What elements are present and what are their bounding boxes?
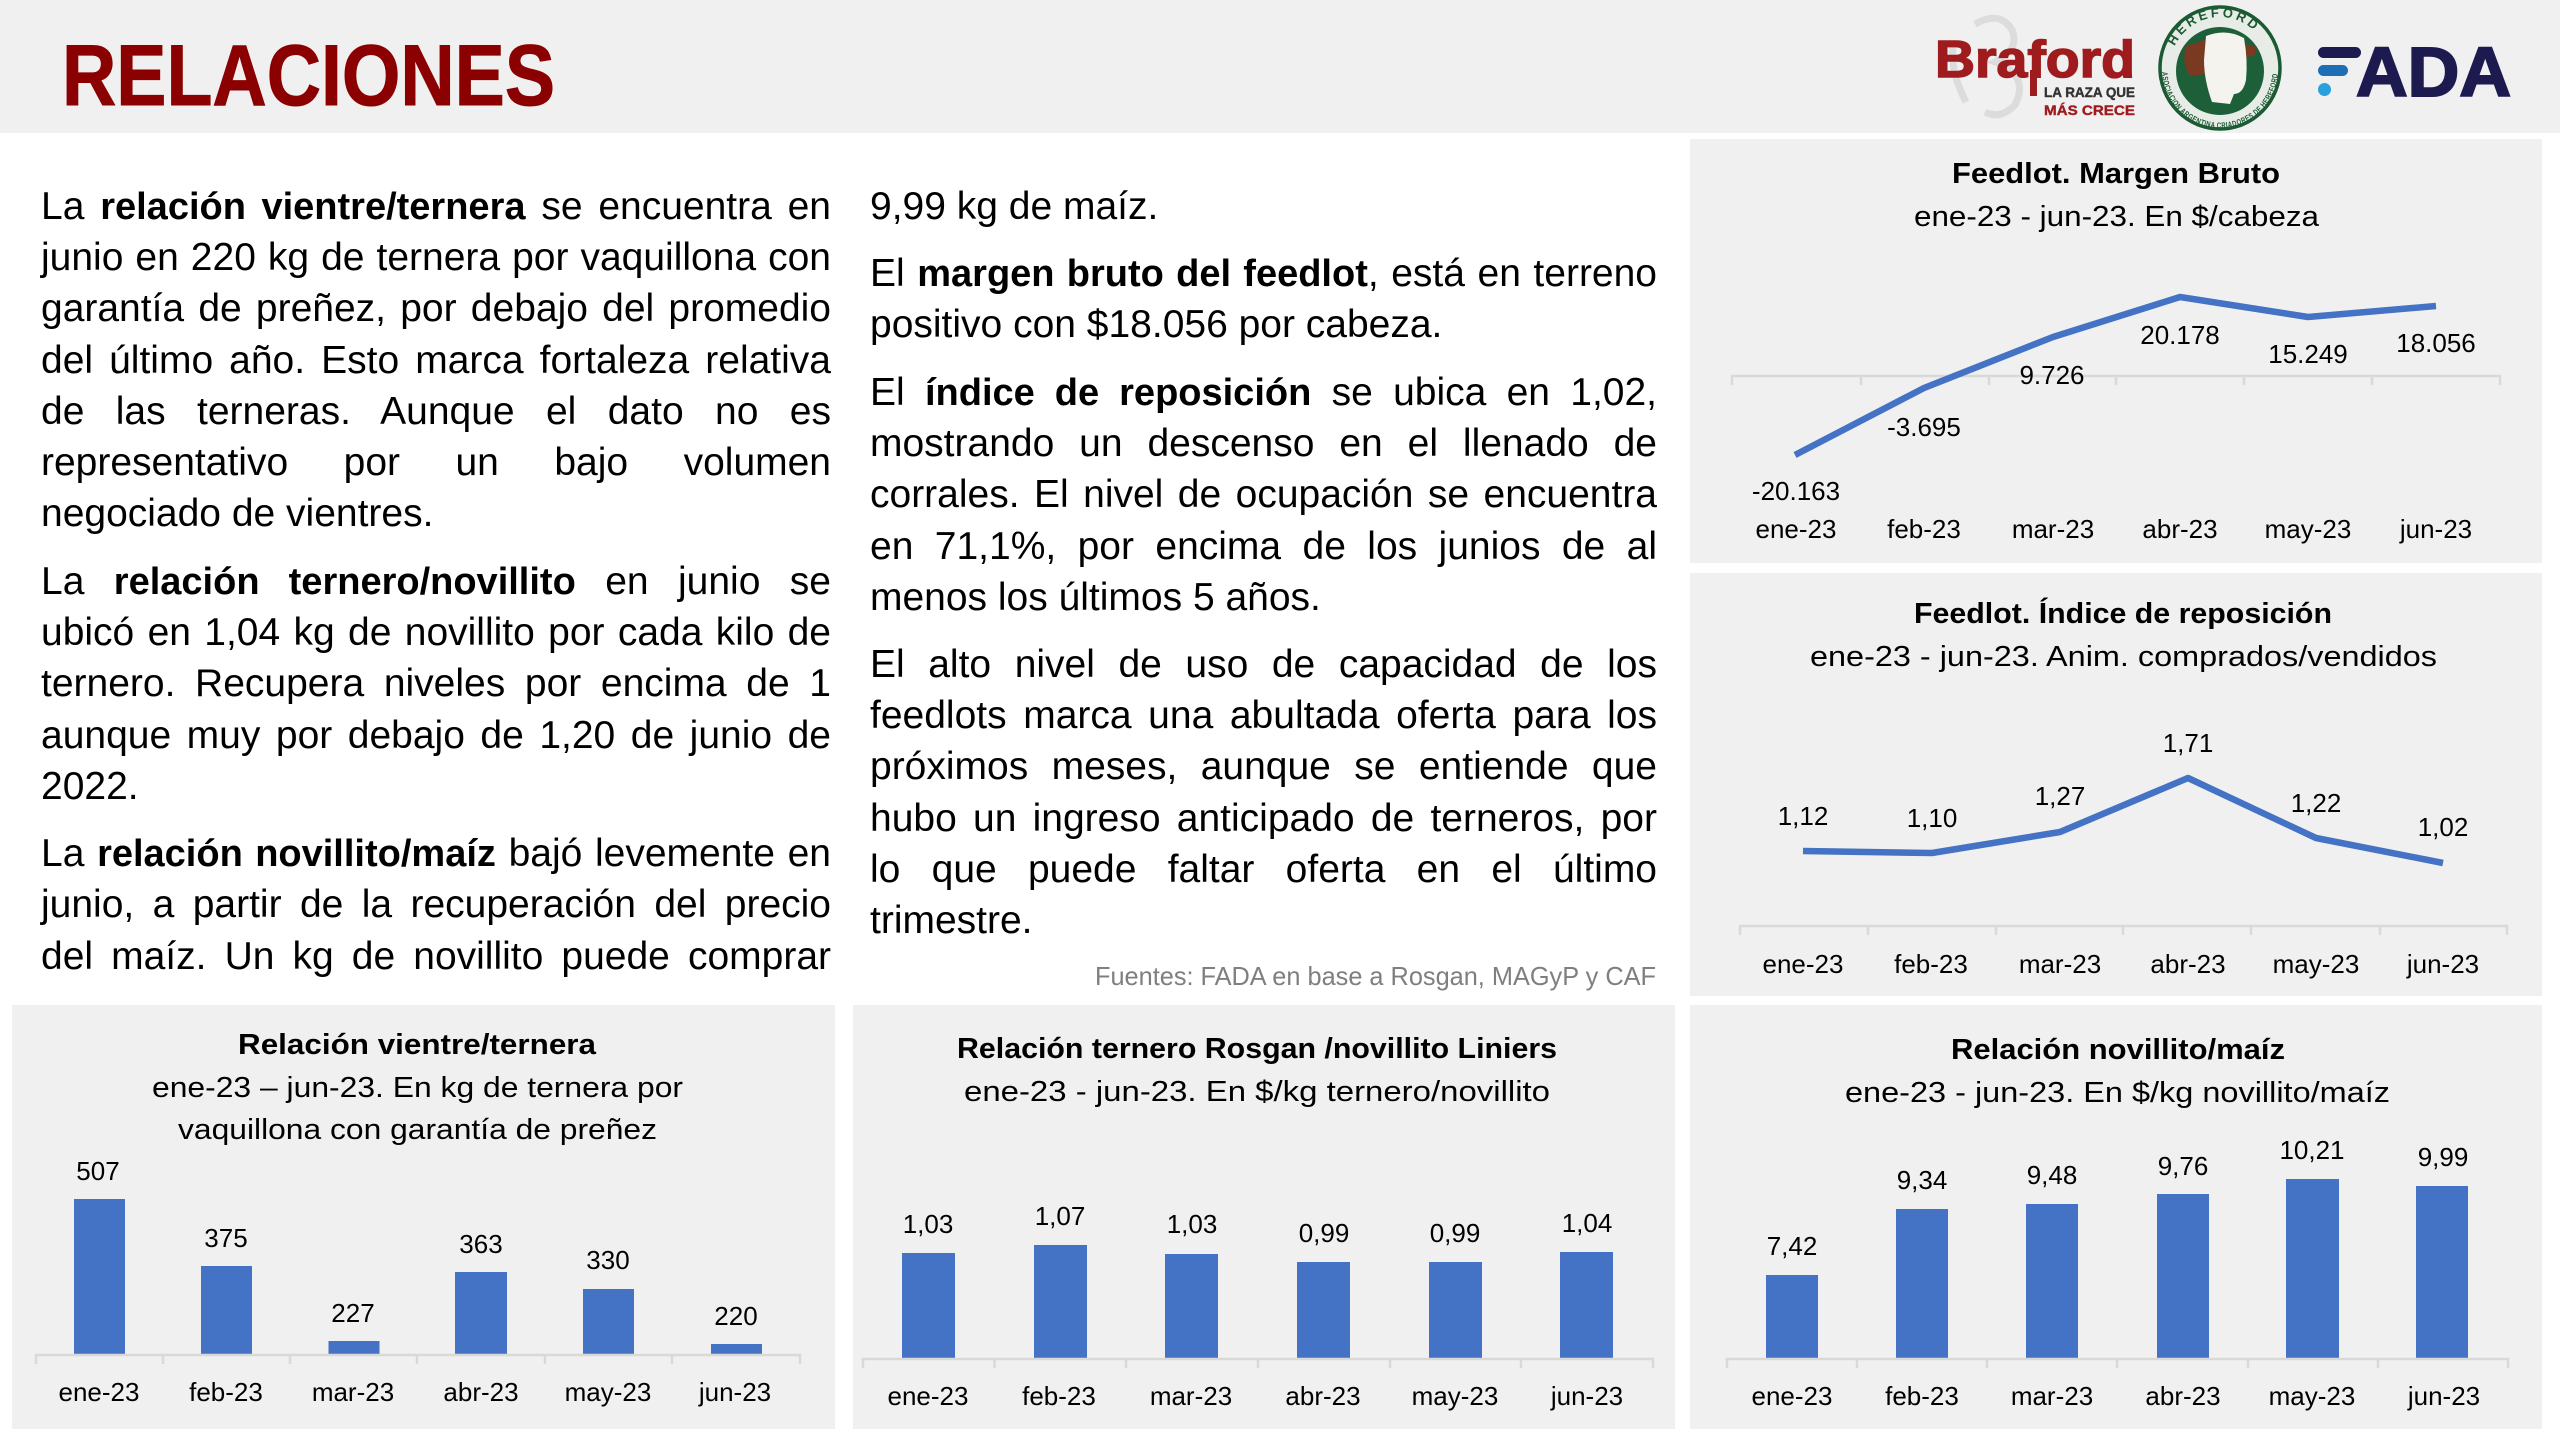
text block: relacion ternero/novillito: aunque muy por debajo de 1,20 de junio de bbox=[41, 714, 831, 757]
value labels: 227 bbox=[331, 1298, 375, 1328]
text block: relacion ternero/novillito: 2022. bbox=[41, 765, 139, 808]
month labels: mar-23 bbox=[2019, 949, 2101, 979]
value labels: 1,10 bbox=[1907, 803, 1957, 833]
text block: capacidad de feedlots: hubo un ingreso anticipado de terneros, por bbox=[870, 797, 1657, 840]
text block: relacion vientre/ternera: La relación vientre/ternera se encuentra en bbox=[41, 185, 831, 228]
value labels: 10,21 bbox=[2279, 1135, 2345, 1165]
value labels: -20.163 bbox=[1752, 476, 1840, 506]
month labels: jun-23 bbox=[2399, 514, 2472, 544]
text block: relacion vientre/ternera: garantía de preñez, por debajo del promedio bbox=[41, 287, 831, 330]
month labels: abr-23 bbox=[2142, 514, 2218, 544]
value labels: 220 bbox=[714, 1301, 758, 1331]
text block: continuation: 9,99 kg de maíz. bbox=[870, 185, 1158, 228]
chart subtitle: ene-23 - jun-23. En $/kg novillito/maíz bbox=[1845, 1077, 2390, 1109]
value labels: 1,22 bbox=[2291, 788, 2341, 818]
logo: Braford bbox=[1935, 18, 2135, 118]
month labels: jun-23 bbox=[2407, 1381, 2480, 1411]
logo: FADA: ADA bbox=[2356, 33, 2511, 111]
month labels: abr-23 bbox=[443, 1377, 519, 1407]
value labels: 9,99 bbox=[2418, 1142, 2468, 1172]
text block: relacion vientre/ternera: de las terneras. Aunque el dato no es bbox=[41, 390, 831, 433]
value labels: 1,12 bbox=[1778, 801, 1828, 831]
value labels: 7,42 bbox=[1767, 1231, 1817, 1261]
text block: indice de reposicion: corrales. El nivel de ocupación se encuentra bbox=[870, 473, 1657, 516]
text block: indice de reposicion: mostrando un descenso en el llenado de bbox=[870, 422, 1657, 465]
value labels: 0,99 bbox=[1299, 1218, 1349, 1248]
text block: relacion vientre/ternera: del último año. Esto marca fortaleza relativa bbox=[41, 339, 831, 382]
panel: Feedlot margen bruto bbox=[1690, 139, 2542, 563]
panel: relacion ternero/novillito bbox=[853, 1005, 1675, 1429]
value labels: 18.056 bbox=[2396, 328, 2476, 358]
month labels: may-23 bbox=[565, 1377, 651, 1407]
value labels: 1,03 bbox=[903, 1209, 953, 1239]
value labels: 363 bbox=[459, 1229, 503, 1259]
value labels: 507 bbox=[76, 1156, 120, 1186]
logo: Hereford bbox=[2158, 5, 2282, 131]
value labels: 9.726 bbox=[2019, 360, 2085, 390]
month labels: mar-23 bbox=[2011, 1381, 2093, 1411]
value labels: 1,71 bbox=[2163, 728, 2213, 758]
logo: Hereford: ASOCIACION ARGENTINA CRIADORES DE HEREFORD bbox=[2162, 72, 2278, 128]
month labels: feb-23 bbox=[189, 1377, 263, 1407]
logo: Hereford: HEREFORD bbox=[2168, 8, 2258, 46]
value labels bbox=[1767, 1135, 2468, 1261]
chart title: Relación vientre/ternera bbox=[238, 1029, 597, 1061]
text block: relacion vientre/ternera bbox=[40, 185, 831, 535]
text block: margen bruto: positivo con $18.056 por cabeza. bbox=[870, 303, 1442, 346]
text block: capacidad de feedlots: feedlots marca una abultada oferta para los bbox=[870, 694, 1657, 737]
value labels: 1,07 bbox=[1035, 1201, 1085, 1231]
text block: relacion ternero/novillito bbox=[41, 560, 831, 808]
text block: capacidad de feedlots: trimestre. bbox=[870, 899, 1033, 942]
bar chart bbox=[1766, 1179, 2468, 1358]
text block: relacion vientre/ternera: junio en 220 kg de ternera por vaquillona con bbox=[41, 236, 831, 279]
month labels: abr-23 bbox=[2145, 1381, 2221, 1411]
chart title: Feedlot. Margen Bruto bbox=[1952, 158, 2280, 190]
month labels: may-23 bbox=[2273, 949, 2359, 979]
month labels: mar-23 bbox=[1150, 1381, 1232, 1411]
chart title: Relación ternero Rosgan /novillito Liniers bbox=[957, 1033, 1557, 1065]
month labels: ene-23 bbox=[59, 1377, 139, 1407]
chart subtitle: ene-23 - jun-23. Anim. comprados/vendidos bbox=[1810, 641, 2437, 673]
value labels: -3.695 bbox=[1887, 412, 1961, 442]
month labels: feb-23 bbox=[1894, 949, 1968, 979]
text block: relacion ternero/novillito: ternero. Recupera niveles por encima de 1 bbox=[41, 662, 831, 705]
chart subtitle: vaquillona con garantía de preñez bbox=[178, 1114, 657, 1146]
text block: capacidad de feedlots: El alto nivel de uso de capacidad de los bbox=[870, 643, 1657, 686]
month labels: mar-23 bbox=[312, 1377, 394, 1407]
text block: capacidad de feedlots: próximos meses, aunque se entiende que bbox=[870, 745, 1657, 788]
line chart: indice bbox=[1803, 778, 2443, 863]
value labels: 375 bbox=[204, 1223, 248, 1253]
value labels bbox=[76, 1156, 758, 1331]
header band bbox=[0, 0, 2560, 133]
month labels: jun-23 bbox=[698, 1377, 771, 1407]
panel: Feedlot indice de reposicion bbox=[1690, 573, 2542, 996]
text block: indice de reposicion: El índice de reposición se ubica en 1,02, bbox=[870, 371, 1657, 414]
text block: indice de reposicion bbox=[870, 371, 1657, 619]
panel: relacion novillito/maiz bbox=[1690, 1005, 2542, 1429]
value labels bbox=[1752, 320, 2476, 506]
month labels bbox=[888, 1381, 1623, 1411]
chart title: Feedlot. Índice de reposición bbox=[1914, 596, 2332, 630]
chart title: Relación novillito/maíz bbox=[1951, 1034, 2285, 1066]
text block: margen bruto bbox=[870, 252, 1657, 346]
value labels: 15.249 bbox=[2268, 339, 2348, 369]
month labels: mar-23 bbox=[2012, 514, 2094, 544]
month labels: feb-23 bbox=[1885, 1381, 1959, 1411]
month labels: ene-23 bbox=[888, 1381, 968, 1411]
line chart: margen bruto bbox=[1795, 297, 2436, 455]
value labels: 330 bbox=[586, 1245, 630, 1275]
value labels: 1,04 bbox=[1562, 1208, 1612, 1238]
text block: relacion novillito/maiz: junio, a partir de la recuperación del precio bbox=[41, 883, 831, 926]
month labels bbox=[1763, 949, 2479, 979]
bar chart bbox=[74, 1199, 762, 1354]
month labels: abr-23 bbox=[2150, 949, 2226, 979]
month labels: ene-23 bbox=[1752, 1381, 1832, 1411]
value labels: 20.178 bbox=[2140, 320, 2220, 350]
month labels: feb-23 bbox=[1022, 1381, 1096, 1411]
month labels: jun-23 bbox=[2406, 949, 2479, 979]
text block: relacion ternero/novillito: La relación ternero/novillito en junio se bbox=[41, 560, 831, 603]
text block: relacion novillito/maiz: La relación novillito/maíz bajó levemente en bbox=[41, 832, 831, 875]
text block: relacion novillito/maiz: del maíz. Un kg de novillito puede comprar bbox=[41, 935, 831, 978]
source note: Fuentes: FADA en base a Rosgan, MAGyP y CAF bbox=[1095, 961, 1656, 991]
panel: relacion vientre/ternera bbox=[12, 1005, 835, 1429]
text block: indice de reposicion: menos los últimos 5 años. bbox=[870, 576, 1321, 619]
month labels: may-23 bbox=[2269, 1381, 2355, 1411]
value labels bbox=[903, 1201, 1612, 1248]
value labels: 1,03 bbox=[1167, 1209, 1217, 1239]
value labels: 9,34 bbox=[1897, 1165, 1947, 1195]
value labels: 1,27 bbox=[2035, 781, 2085, 811]
month labels bbox=[59, 1377, 771, 1407]
logo: Braford: LA RAZA QUE bbox=[2044, 84, 2135, 100]
logo: Braford: Braford bbox=[1935, 31, 2135, 89]
month labels: ene-23 bbox=[1756, 514, 1836, 544]
month labels bbox=[1756, 514, 2472, 544]
value labels: 9,48 bbox=[2027, 1160, 2077, 1190]
text block: relacion vientre/ternera: negociado de vientres. bbox=[41, 492, 433, 535]
value labels: 9,76 bbox=[2158, 1151, 2208, 1181]
month labels: abr-23 bbox=[1285, 1381, 1361, 1411]
bar chart bbox=[902, 1245, 1613, 1358]
value labels: 1,02 bbox=[2418, 812, 2468, 842]
month labels bbox=[1752, 1381, 2480, 1411]
text block: capacidad de feedlots: lo que puede faltar oferta en el último bbox=[870, 848, 1657, 891]
text block: capacidad de feedlots bbox=[870, 643, 1657, 942]
title: RELACIONES bbox=[62, 28, 555, 124]
chart subtitle: ene-23 – jun-23. En kg de ternera por bbox=[152, 1072, 683, 1104]
text block: relacion ternero/novillito: ubicó en 1,04 kg de novillito por cada kilo de bbox=[41, 611, 831, 654]
chart subtitle: ene-23 - jun-23. En $/cabeza bbox=[1914, 201, 2320, 233]
text block: relacion vientre/ternera: representativo por un bajo volumen bbox=[41, 441, 831, 484]
text block: relacion novillito/maiz bbox=[40, 832, 831, 978]
text block: margen bruto: El margen bruto del feedlot, está en terreno bbox=[870, 252, 1657, 295]
value labels: 0,99 bbox=[1430, 1218, 1480, 1248]
month labels: may-23 bbox=[2265, 514, 2351, 544]
month labels: ene-23 bbox=[1763, 949, 1843, 979]
value labels bbox=[1778, 728, 2468, 842]
month labels: may-23 bbox=[1412, 1381, 1498, 1411]
month labels: feb-23 bbox=[1887, 514, 1961, 544]
text block: indice de reposicion: en 71,1%, por encima de los junios de al bbox=[870, 525, 1657, 568]
chart subtitle: ene-23 - jun-23. En $/kg ternero/novillito bbox=[964, 1076, 1550, 1108]
logo: Braford: MÁS CRECE bbox=[2044, 102, 2135, 118]
month labels: jun-23 bbox=[1550, 1381, 1623, 1411]
chart subtitle bbox=[152, 1072, 683, 1146]
